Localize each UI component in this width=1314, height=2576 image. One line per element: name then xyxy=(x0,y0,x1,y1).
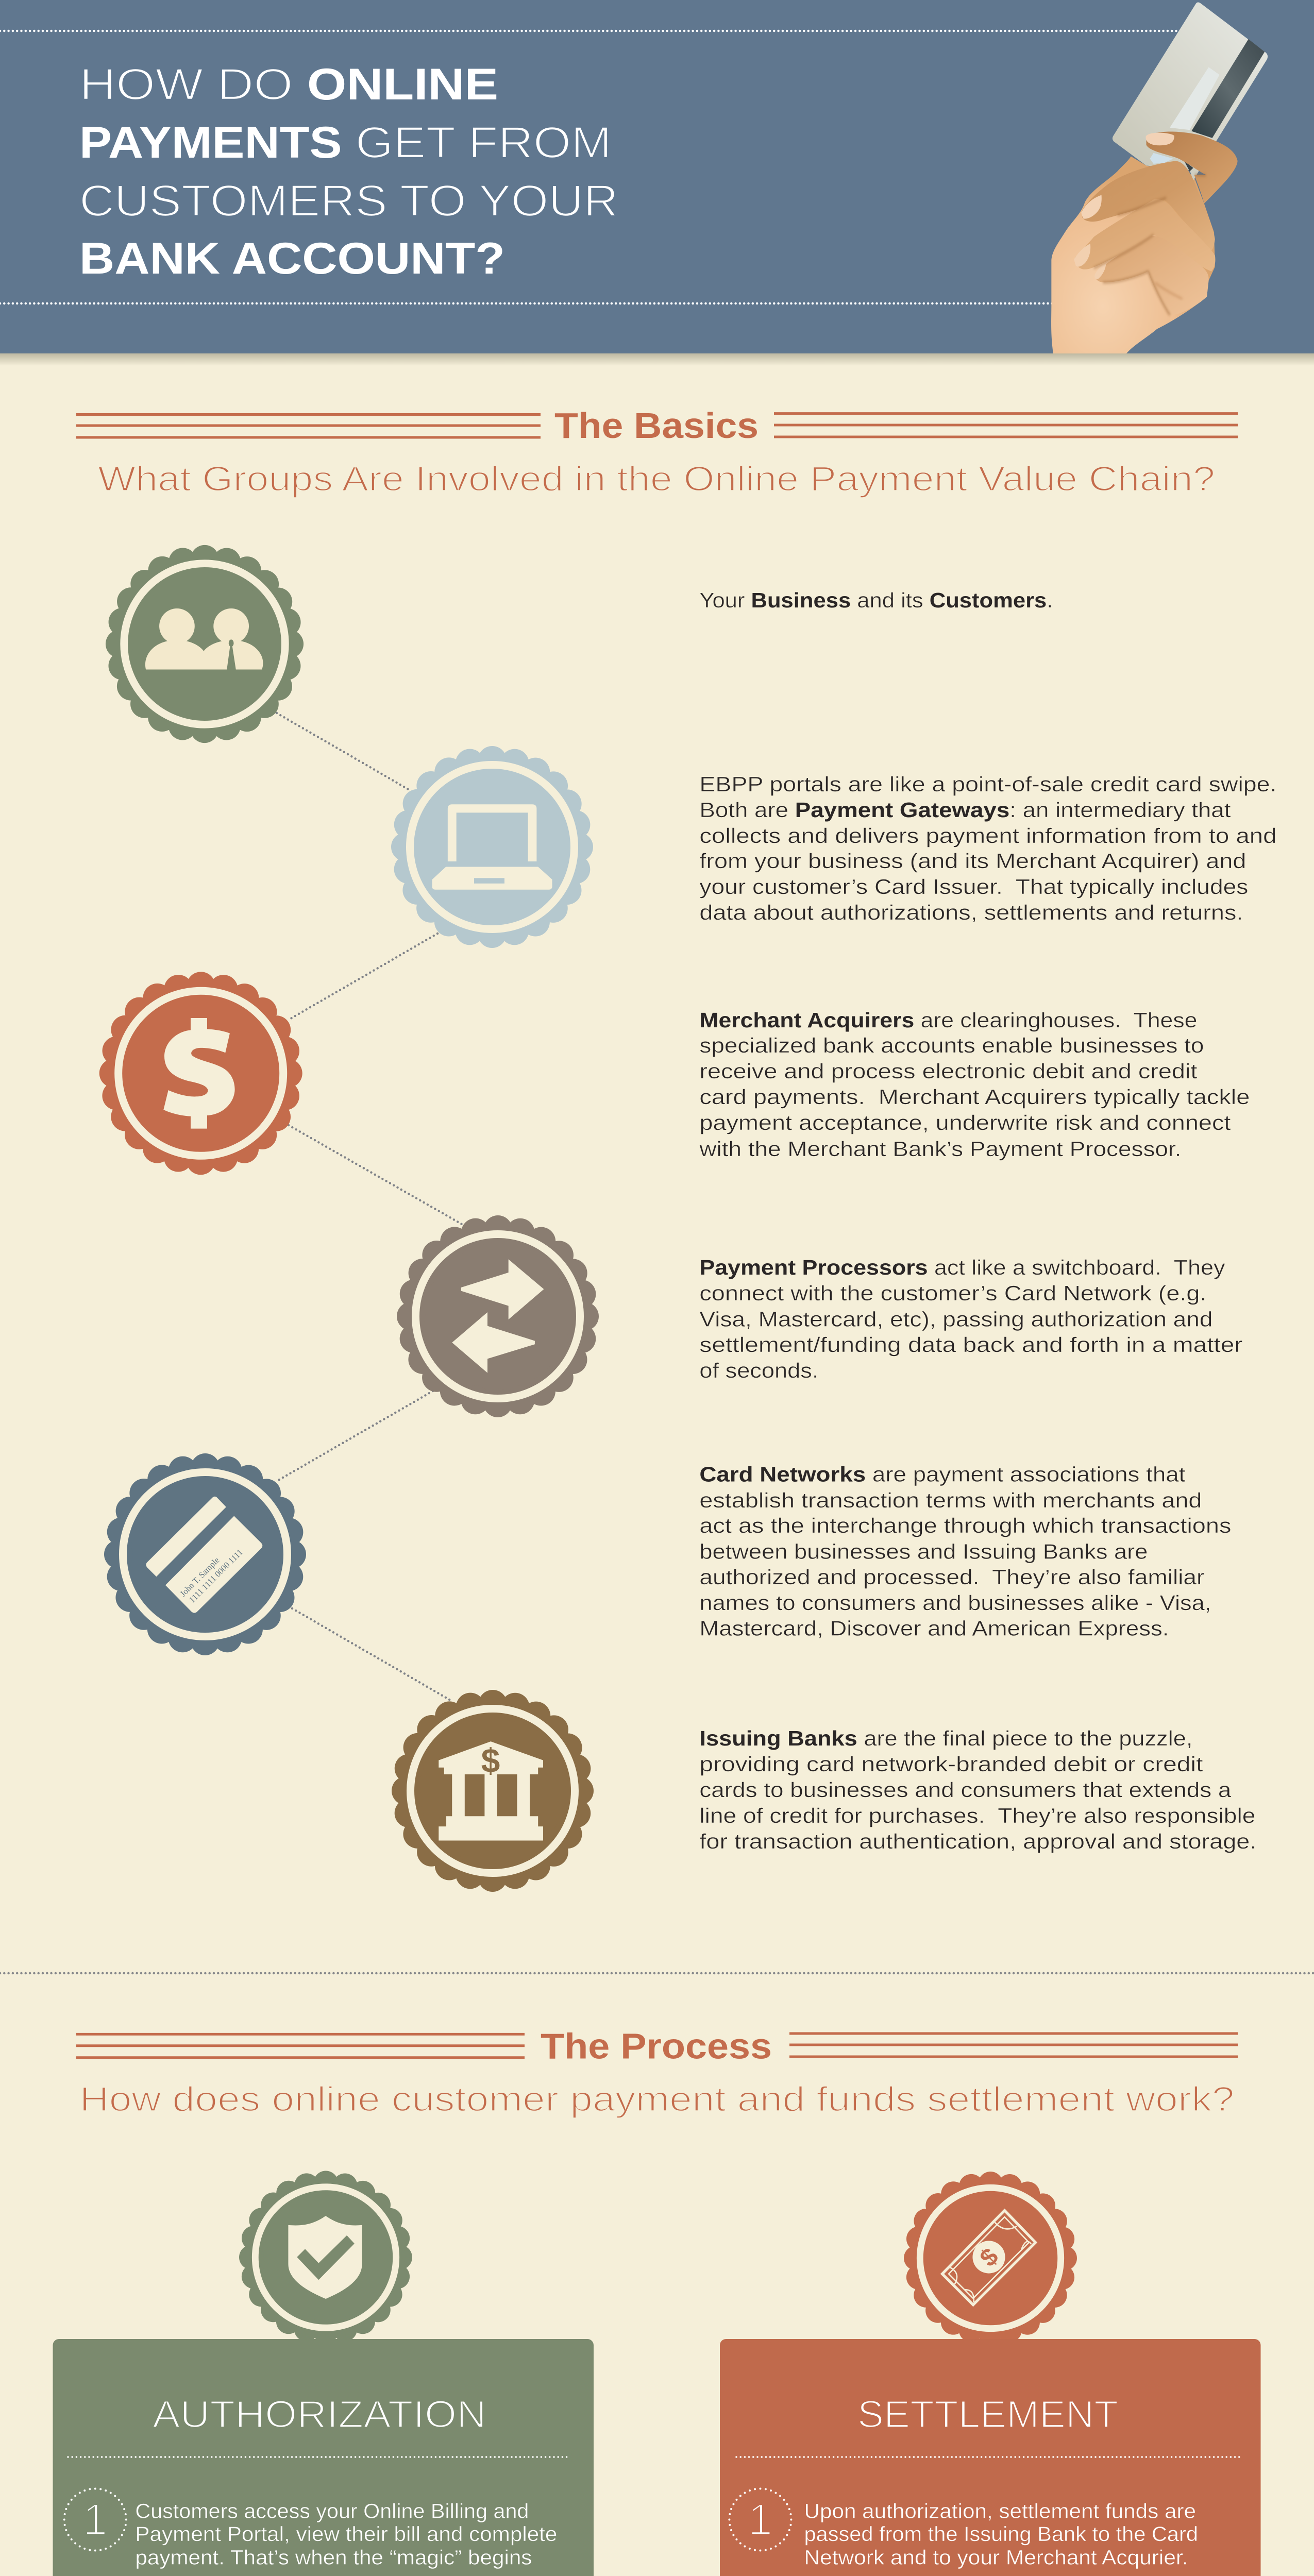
subheading: funds settlement question: How does online customer payment and funds settlement work? xyxy=(79,2080,1235,2119)
text: payment processors: connect with the customer’s Card Network (e.g. xyxy=(699,1281,1206,1305)
badge: card network credit card: John T. Sample xyxy=(178,1555,222,1599)
icon: hand holding credit card xyxy=(1051,2,1268,353)
text: payment gateways: data about authorizations, settlements and returns. xyxy=(699,901,1243,924)
badge: card network credit card: 1111 1111 0000 1111 xyxy=(187,1547,245,1605)
title xyxy=(79,60,618,283)
text: card networks: act as the interchange through which transactions xyxy=(699,1514,1231,1537)
badge: settlement money xyxy=(915,2182,1066,2334)
text: card networks: establish transaction terms with merchants and xyxy=(699,1488,1202,1512)
heading: the process xyxy=(76,2026,1238,2066)
text: payment processors: Visa, Mastercard, etc), passing authorization and xyxy=(699,1308,1212,1331)
heading: the process: The Process xyxy=(541,2026,772,2066)
text: business and customers: Your Business and its Customers . xyxy=(699,588,1053,612)
text: issuing banks: line of credit for purchases. They’re also responsible xyxy=(699,1804,1255,1827)
step 1 xyxy=(729,2488,1198,2569)
title: HOW DO ONLINE xyxy=(79,60,498,109)
text: payment gateways: from your business (and its Merchant Acquirer) and xyxy=(699,849,1246,873)
badge: card network credit card xyxy=(116,1466,294,1643)
text: payment processors xyxy=(699,1256,1242,1382)
step 1: passed from the Issuing Bank to the Card xyxy=(804,2523,1198,2546)
text: payment processors: of seconds. xyxy=(699,1359,818,1382)
step 1: Network and to your Merchant Acqurier. xyxy=(804,2546,1188,2569)
subheading: value chain question: What Groups Are Involved in the Online Payment Value Chain? xyxy=(98,460,1215,499)
text: issuing banks xyxy=(699,1726,1256,1853)
step 1: 1 xyxy=(83,2495,108,2545)
text: card networks: Mastercard, Discover and American Express. xyxy=(699,1617,1169,1640)
badge: merchant acquirer dollar xyxy=(112,985,290,1162)
text: card networks: between businesses and Issuing Banks are xyxy=(699,1540,1148,1564)
heading: the basics: The Basics xyxy=(554,405,759,446)
badge: authorization shield xyxy=(250,2181,401,2333)
text: payment gateways: EBPP portals are like a point-of-sale credit card swipe. xyxy=(699,772,1276,796)
panel: the basics xyxy=(76,405,1276,1879)
badge: payment processor arrows xyxy=(409,1228,586,1405)
badge: issuing bank building xyxy=(404,1702,581,1879)
panel: settlement xyxy=(720,2339,1260,2576)
text: payment gateways: your customer’s Card Issuer. That typically includes xyxy=(699,875,1248,899)
step 1: Payment Portal, view their bill and complete xyxy=(135,2523,557,2546)
text: card networks: authorized and processed. They’re also familiar xyxy=(699,1565,1204,1589)
badge: issuing bank building: $ xyxy=(481,1741,500,1780)
text: payment gateways: collects and delivers payment information from to and xyxy=(699,824,1276,848)
text: payment gateways: Both are Payment Gateways : an intermediary that xyxy=(699,798,1231,822)
title: BANK ACCOUNT? xyxy=(79,234,505,283)
step 1: 1 xyxy=(748,2495,772,2545)
text: payment gateways xyxy=(699,772,1276,924)
step 1: Customers access your Online Billing and xyxy=(135,2500,529,2522)
title: PAYMENTS GET FROM xyxy=(79,118,612,167)
text: issuing banks: Issuing Banks are the final piece to the puzzle, xyxy=(699,1726,1192,1750)
text: payment processors: Payment Processors act like a switchboard. They xyxy=(699,1256,1225,1279)
badge: settlement money: $ xyxy=(974,2243,1004,2272)
text: merchant acquirers: with the Merchant Bank’s Payment Processor. xyxy=(699,1137,1181,1161)
badge: business and customers xyxy=(117,557,292,731)
text: issuing banks: providing card network-branded debit or credit xyxy=(699,1752,1203,1776)
title: CUSTOMERS TO YOUR xyxy=(79,176,618,226)
step 1: payment. That’s when the “magic” begins xyxy=(135,2546,532,2569)
text: merchant acquirers: specialized bank accounts enable businesses to xyxy=(699,1033,1204,1057)
panel title: settlement: SETTLEMENT xyxy=(857,2393,1118,2436)
dotted connectors between badges xyxy=(276,713,462,1702)
text: issuing banks: cards to businesses and consumers that extends a xyxy=(699,1778,1232,1802)
text: merchant acquirers: Merchant Acquirers are clearinghouses. These xyxy=(699,1008,1197,1032)
step 1 xyxy=(64,2488,557,2569)
panel: authorization xyxy=(53,2339,594,2576)
section divider xyxy=(0,1972,1314,1974)
text: merchant acquirers: card payments. Merchant Acquirers typically tackle xyxy=(699,1085,1250,1109)
text: card networks xyxy=(699,1463,1231,1640)
heading: the basics xyxy=(76,405,1238,446)
panel title: authorization: AUTHORIZATION xyxy=(153,2393,486,2436)
badge: payment gateway laptop xyxy=(403,758,581,936)
text: merchant acquirers: receive and process electronic debit and credit xyxy=(699,1059,1198,1083)
panel: the process xyxy=(53,2026,1260,2576)
header band xyxy=(0,0,1314,366)
step 1: Upon authorization, settlement funds are xyxy=(804,2500,1196,2522)
text: payment processors: settlement/funding data back and forth in a matter xyxy=(699,1333,1242,1357)
text: merchant acquirers xyxy=(699,1008,1250,1161)
text: issuing banks: for transaction authentication, approval and storage. xyxy=(699,1829,1256,1853)
text: card networks: names to consumers and businesses alike - Visa, xyxy=(699,1591,1211,1615)
text: merchant acquirers: payment acceptance, underwrite risk and connect xyxy=(699,1111,1231,1134)
text: card networks: Card Networks are payment associations that xyxy=(699,1463,1186,1486)
